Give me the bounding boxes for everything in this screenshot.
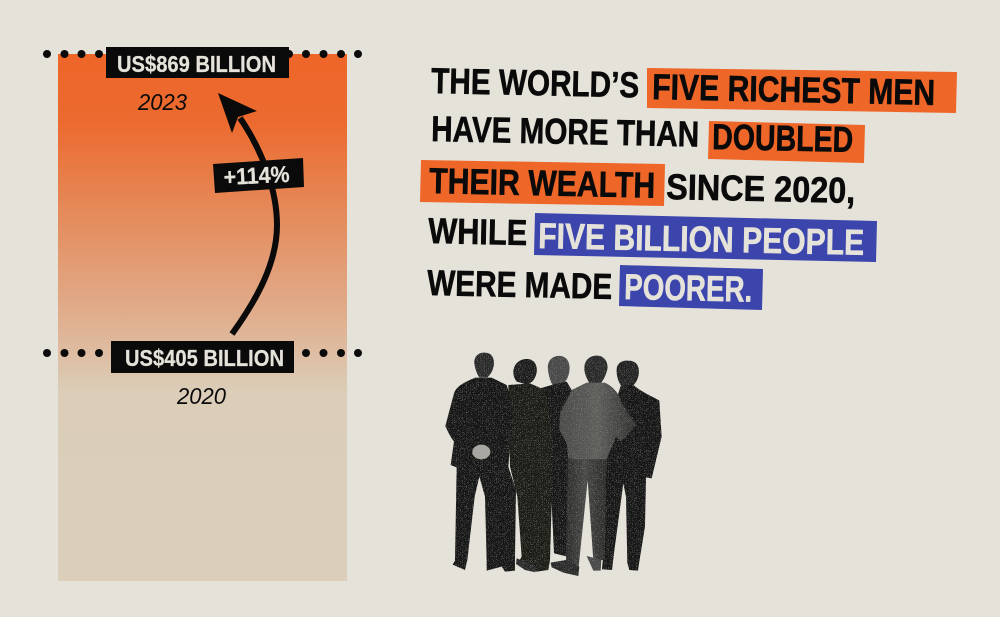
image: five men in suits seen from behind	[445, 353, 662, 576]
year: 2020: 2020	[176, 383, 226, 409]
line 2: HAVE MORE THAN	[431, 108, 700, 155]
headline text block	[420, 60, 957, 310]
dotted line: 2023 level	[43, 50, 362, 58]
line 3: SINCE 2020,	[666, 166, 856, 211]
label: US$869 billion: US$869 BILLION	[117, 51, 276, 77]
emphasis: poorer: POORER.	[624, 266, 753, 310]
label: +114%: +114%	[223, 161, 290, 190]
emphasis: their wealth: THEIR WEALTH	[429, 160, 656, 206]
highlight: poorer	[619, 265, 763, 310]
gradient bar	[58, 54, 347, 581]
man 5	[602, 361, 662, 571]
emphasis: doubled: DOUBLED	[712, 116, 854, 160]
highlight: five billion people	[534, 213, 877, 262]
highlight: their wealth	[420, 160, 665, 206]
label: US$405 billion: US$405 BILLION	[125, 345, 284, 371]
label: +114%	[213, 158, 304, 193]
line 5: WERE MADE	[427, 262, 613, 307]
man 3	[540, 356, 572, 557]
emphasis: five richest men: FIVE RICHEST MEN	[652, 66, 936, 113]
man 1	[445, 353, 516, 572]
man 2	[508, 359, 553, 572]
emphasis: five billion people: FIVE BILLION PEOPLE	[538, 215, 865, 263]
line 1: THE WORLD’S	[431, 60, 640, 105]
arrow: growth from 2020 to 2023	[218, 93, 277, 334]
dotted line: 2020 level	[43, 349, 362, 357]
man 4	[551, 356, 637, 576]
panel: wealth bar chart	[43, 47, 362, 581]
line 4: WHILE	[428, 210, 528, 253]
highlight: doubled	[708, 121, 865, 163]
year: 2023: 2023	[137, 89, 187, 115]
hand	[472, 445, 490, 459]
highlight: five richest men	[647, 68, 957, 113]
